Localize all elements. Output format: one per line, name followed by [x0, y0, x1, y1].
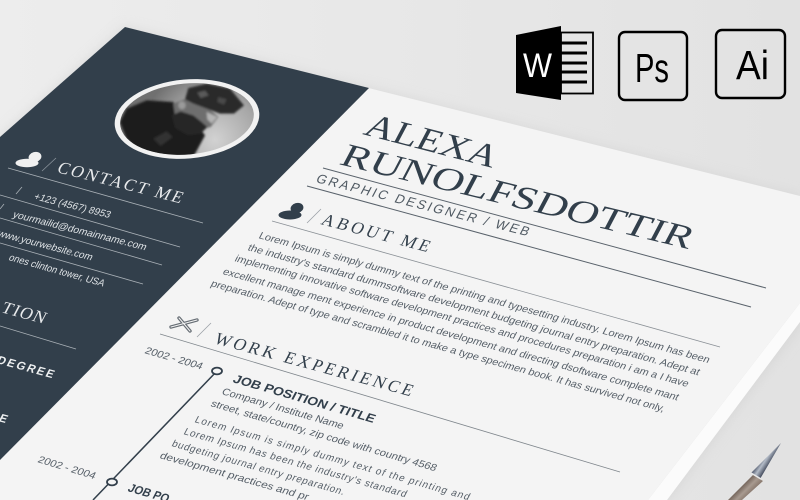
about paragraph: excellent manage ment experience in product development and directing dsoftware complete mant: [221, 267, 681, 403]
pen: [728, 443, 781, 500]
sidebar panel: [0, 27, 369, 460]
job subtitle: GRAPHIC DESIGNER / WEB: [314, 171, 533, 239]
education rule: [0, 326, 76, 349]
job entry 1: budgeting journal entry preparation.: [170, 439, 347, 498]
timeline: [93, 368, 222, 500]
name rules: [307, 168, 766, 307]
icon: photoshop: Ps: [635, 45, 669, 91]
job entry 1: Lorem Ipsum has been the industry's standard: [182, 427, 409, 500]
job entry 1: development practices and pr: [158, 451, 312, 500]
heading: work experience: WORK EXPERIENCE: [211, 329, 418, 400]
name: ALEXA: [358, 108, 507, 175]
about divider: [307, 209, 321, 223]
job entry 1: JOB POSITION / TITLE: [231, 372, 378, 426]
date 2: 2002 - 2004: [36, 455, 98, 482]
contact: email: yourmailid@domainname.com: [11, 210, 149, 253]
heading: contact me: CONTACT ME: [54, 158, 187, 207]
about paragraph: implementing innovative software development practices and procedures preparation i am a I have: [233, 254, 691, 390]
contact: phone: +123 (4567) 8953: [32, 192, 113, 221]
icon: tools: [171, 318, 197, 331]
contact divider: [42, 158, 56, 171]
about rule: [272, 221, 720, 347]
heading: about me: ABOUT ME: [318, 210, 434, 256]
icon: word: W: [523, 47, 552, 85]
icon: illustrator: [716, 30, 785, 98]
work divider: [197, 323, 211, 337]
name: RUNOLFSDOTTIR: [334, 138, 702, 256]
job entry 1: Company / Institute Name: [220, 387, 346, 432]
about paragraph: preparation. Adept of type and scrambled it to make a type specimen book. It has survived not only,: [209, 279, 667, 415]
job entry 1: [158, 372, 472, 500]
icon: word: [516, 26, 593, 100]
about paragraph: Lorem Ipsum is simply dummy text of the printing and typesetting industry. Lorem Ipsum has been: [257, 231, 712, 366]
page edge: [648, 303, 800, 500]
icon: about person: [278, 201, 305, 220]
job entry 1: street, state/country, zip code with country 4568: [209, 399, 439, 474]
name: [334, 108, 702, 256]
date 1: 2002 - 2004: [143, 346, 205, 372]
about paragraph: [209, 231, 712, 415]
work rule: [160, 334, 620, 472]
icon: contact person: [16, 150, 43, 167]
contact rules: [0, 168, 203, 284]
icon: illustrator: Ai: [736, 42, 769, 88]
icon: photoshop: [619, 32, 687, 100]
portrait photo: [114, 79, 260, 159]
contact: address: ones clinton tower, USA: [7, 253, 107, 289]
about paragraph: the industry's standard dummsoftware development budgeting journal entry preparation. Adept at: [246, 243, 702, 378]
